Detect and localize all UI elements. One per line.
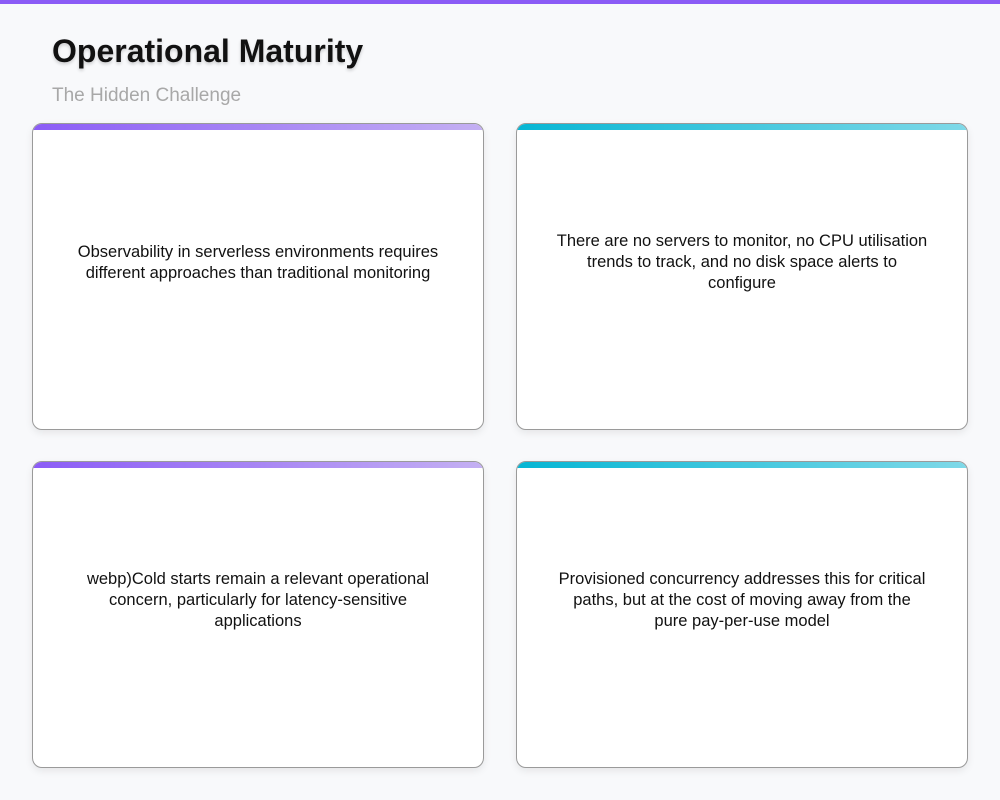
text: observability: Observability in serverless environments requires different approaches than traditional monitoring xyxy=(78,242,438,282)
text: no servers: There are no servers to monitor, no CPU utilisation trends to track, and no disk space alerts to configure xyxy=(557,232,927,292)
panel: observability xyxy=(32,123,484,430)
panel: provisioned concurrency xyxy=(516,461,968,768)
text: provisioned concurrency: Provisioned concurrency addresses this for critical paths, but at the cost of moving away from the pure pay-per-use model xyxy=(559,570,925,630)
panel: no servers xyxy=(516,123,968,430)
subtitle: The Hidden Challenge xyxy=(52,85,241,106)
title: Operational Maturity xyxy=(52,33,363,69)
top accent bar xyxy=(0,0,1000,4)
text: cold starts: webp)Cold starts remain a relevant operational concern, particularly for latency-sensitive applications xyxy=(87,570,429,630)
panel: cold starts xyxy=(32,461,484,768)
